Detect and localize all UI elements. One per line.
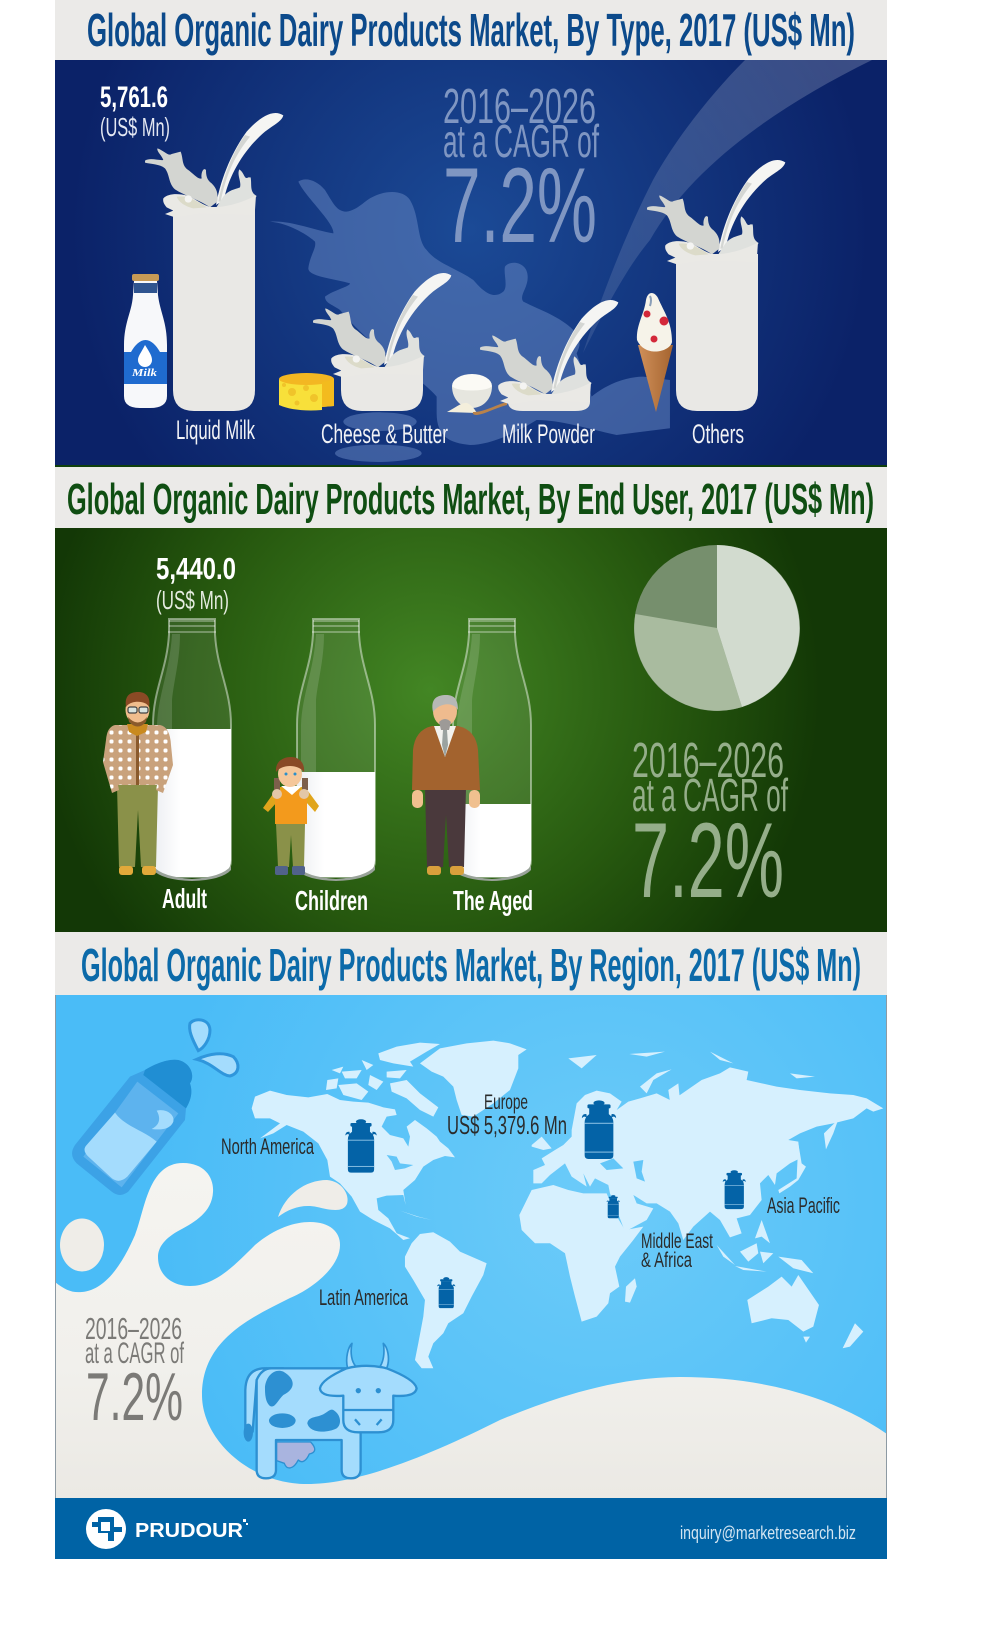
CAGR callout: by type [443, 80, 599, 265]
north america and arctic [252, 1041, 527, 1240]
category labels: by end user: Children [295, 885, 368, 916]
icon: milk powder bowl [447, 374, 507, 415]
footer [55, 1498, 887, 1559]
value: liquid milk: (US$ Mn) [100, 112, 170, 142]
panel: by type [55, 0, 887, 466]
icon: ice cream cone [637, 293, 673, 412]
eurasia africa oceania [519, 1052, 883, 1348]
title band: by end user [55, 465, 887, 528]
CAGR callout: by region: 2016–2026 [85, 1311, 182, 1346]
CAGR callout: by end user: at a CAGR of [632, 769, 788, 821]
CAGR callout: by region [85, 1311, 184, 1435]
category labels: by type: Cheese & Butter [321, 419, 448, 449]
region labels: Europe [484, 1091, 528, 1114]
logo: prudour: PRUDOUR [135, 1520, 244, 1542]
figure: child [263, 757, 319, 875]
CAGR callout: by type: 7.2% [443, 145, 597, 265]
icon: milk bottle: Milk [131, 367, 158, 379]
logo: prudour [86, 1509, 248, 1549]
milk can: middle east [607, 1195, 620, 1218]
value: adult [156, 551, 236, 615]
bar glass: others [647, 160, 785, 411]
background milk stream [583, 60, 872, 353]
bar glass: liquid milk [145, 113, 283, 411]
green background [55, 528, 887, 932]
value: liquid milk: 5,761.6 [100, 81, 168, 114]
CAGR callout: by region: at a CAGR of [85, 1337, 184, 1370]
south america [405, 1232, 487, 1368]
background milk splash [270, 179, 670, 462]
region labels [221, 1091, 840, 1310]
CAGR callout: by end user [632, 734, 788, 920]
category labels: by type: Milk Powder [502, 419, 595, 449]
icon: cow [244, 1343, 417, 1478]
milk can: north america [345, 1119, 377, 1173]
icon: milk bottle [124, 274, 167, 408]
panel: by end user [55, 465, 887, 932]
bar glass: cheese and butter [313, 273, 451, 411]
milk drop: egg [60, 1218, 104, 1272]
category labels: by type [176, 415, 744, 449]
bottle: the aged [453, 619, 531, 881]
figure: adult man [103, 692, 173, 875]
icon: baby bottle [72, 1020, 238, 1195]
category labels: by end user: Adult [162, 883, 207, 914]
milk splash [55, 1163, 887, 1498]
value: adult: 5,440.0 [156, 551, 236, 586]
milk can: europe [582, 1100, 616, 1159]
region labels: Middle East [641, 1230, 713, 1253]
bottle: adult [153, 619, 231, 881]
blue background [55, 60, 887, 466]
bottle: children [297, 619, 375, 881]
milk can: latin america [437, 1277, 455, 1308]
figure: elderly man [412, 695, 480, 875]
category labels: by end user: The Aged [453, 885, 533, 916]
CAGR callout: by type: 2016–2026 [443, 80, 596, 134]
panel: by region [55, 932, 887, 1498]
region labels: Latin America [319, 1285, 409, 1310]
CAGR callout: by end user: 7.2% [632, 800, 784, 920]
value: adult: (US$ Mn) [156, 585, 229, 615]
milk drop: tear [278, 1180, 348, 1217]
category labels: by type: Others [692, 419, 744, 449]
world map [252, 1041, 883, 1368]
milk can: asia pacific [723, 1170, 746, 1209]
pie chart [634, 545, 800, 711]
bar glass: milk powder [480, 300, 618, 411]
region labels: North America [221, 1134, 315, 1159]
CAGR callout: by region: 7.2% [86, 1359, 183, 1435]
category labels: by type: Liquid Milk [176, 415, 255, 445]
category labels: by end user [162, 883, 533, 916]
CAGR callout: by type: at a CAGR of [443, 115, 599, 167]
value: liquid milk [100, 81, 170, 142]
contact email: inquiry@marketresearch.biz [680, 1523, 856, 1543]
sky blue background [55, 995, 887, 1498]
region labels: & Africa [641, 1249, 692, 1272]
CAGR callout: by end user: 2016–2026 [632, 734, 784, 788]
icon: cheese [279, 373, 334, 410]
region labels: US$ 5,379.6 Mn [447, 1110, 567, 1140]
region labels: Asia Pacific [767, 1193, 840, 1218]
